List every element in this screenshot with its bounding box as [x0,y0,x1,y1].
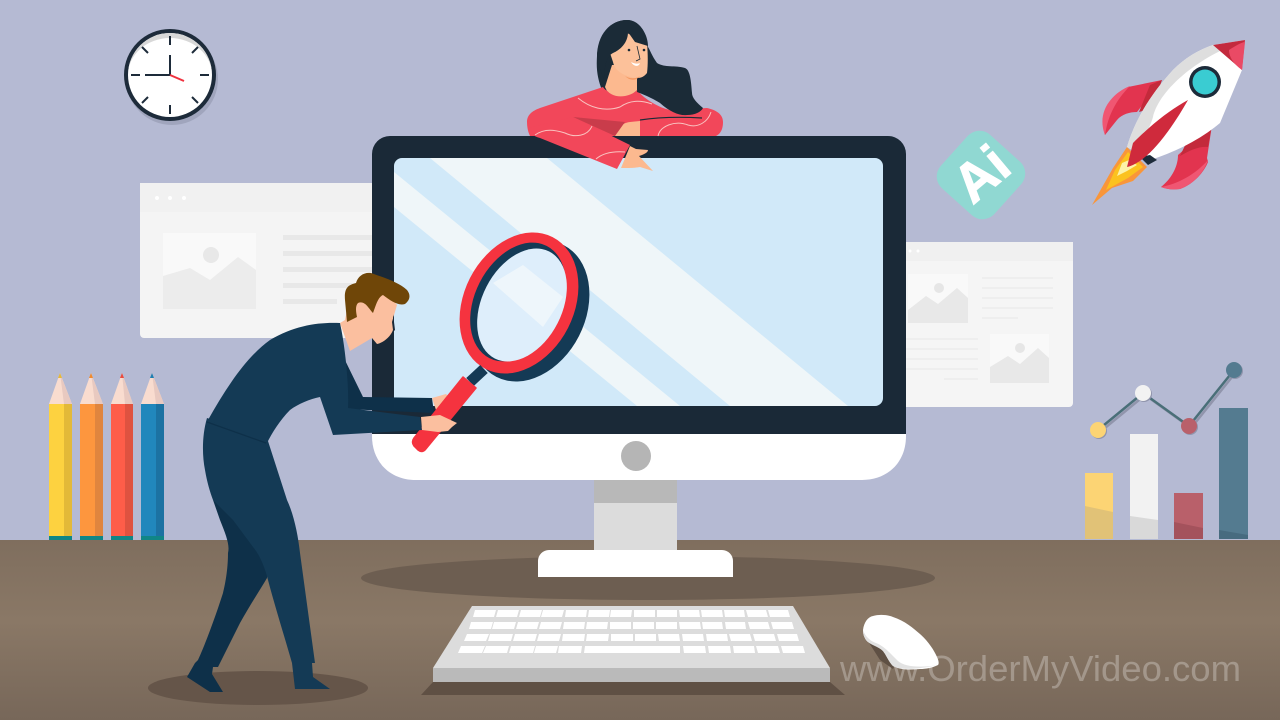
rocket window [1189,66,1221,98]
desk surface [0,540,1280,720]
Ai badge: Ai [942,134,1022,215]
monitor frame [372,136,906,434]
sleeve [528,117,630,169]
bar and line chart [1085,362,1248,539]
hair back [597,20,648,93]
browser window: right [900,242,1073,407]
keyboard [421,606,845,695]
arm gap [615,121,640,136]
key rows [458,610,805,653]
torso and front arm [208,323,422,443]
mouse [863,615,939,670]
magnifying glass [412,232,590,452]
face [610,33,648,78]
hair fringe [597,20,648,80]
eye [393,314,395,332]
monitor stand [538,478,733,577]
power button [621,441,651,471]
back hand [432,394,450,413]
man inspecting with magnifier [187,212,613,692]
monitor shadow [361,556,935,600]
sweater folds [578,98,711,136]
sweater crease [573,117,702,136]
man shadow [148,671,368,705]
rocket [1092,40,1245,205]
hand [621,146,653,171]
neck and head [340,290,397,351]
website watermark: www.OrderMyVideo.com [839,648,1241,689]
front leg [203,418,330,689]
red pencil [111,373,133,540]
hair flowing right [637,47,703,115]
orange pencil [80,373,103,540]
rocket body [1127,40,1245,160]
neck [605,65,637,96]
line [1100,372,1236,432]
yellow pencil [49,373,72,540]
woman leaning on monitor [527,20,723,171]
bars [1085,408,1248,539]
front hand [421,415,457,432]
browser window: left [140,183,380,338]
sweater [527,87,723,136]
eyes nose smile [628,46,645,66]
glass reflection bands [394,158,848,406]
back leg [187,500,270,692]
monitor screen [394,158,883,406]
back arm [340,350,434,413]
flame [1092,147,1147,205]
waist line [207,422,266,443]
pencils [49,373,164,540]
blue pencil [141,373,164,540]
data points [1090,362,1243,439]
wall background [0,0,1280,541]
hair [345,273,409,322]
monitor [372,136,906,480]
monitor chin [372,420,906,480]
Ai badge [930,124,1032,226]
wall clock [124,29,218,125]
